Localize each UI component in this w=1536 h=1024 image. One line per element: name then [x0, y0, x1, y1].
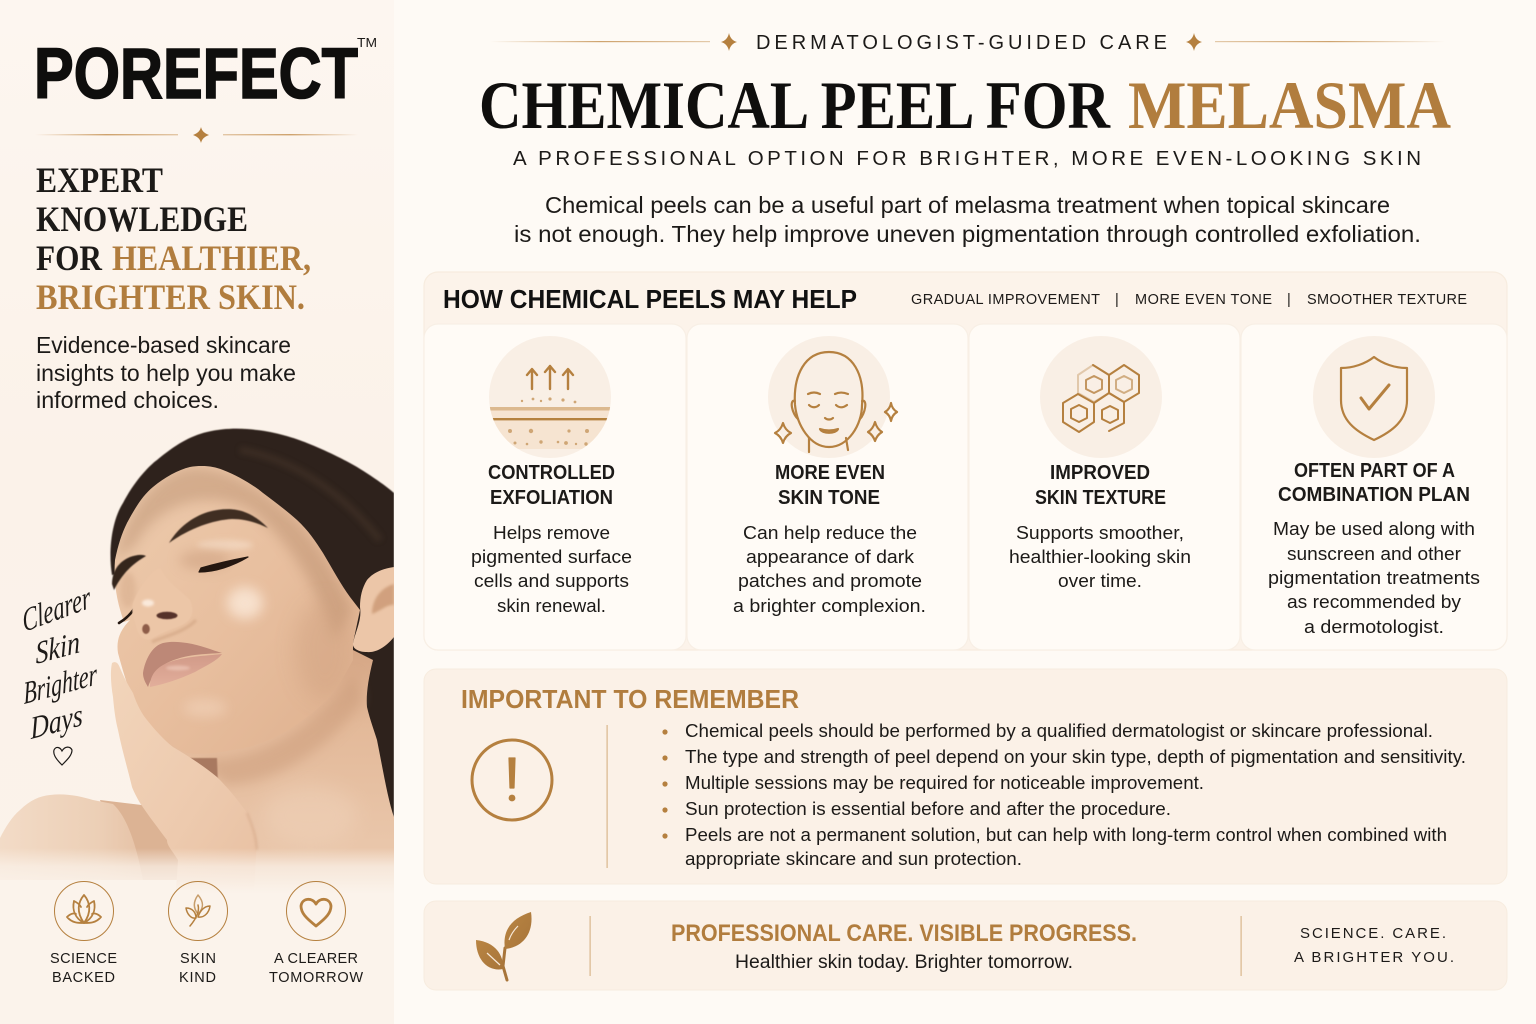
right eye — [199, 557, 248, 572]
bullet list: Peels are not a permanent solution, but can help with long-term control when combined with — [685, 824, 1447, 845]
sidebar description — [36, 332, 296, 413]
footer message — [671, 920, 1137, 973]
sidebar description: insights to help you make — [36, 360, 296, 386]
bullet list — [662, 720, 1466, 869]
bottom fade — [0, 848, 404, 894]
card 1 text — [471, 522, 632, 616]
footer tagline — [1294, 925, 1454, 966]
icon: leaf sprig — [186, 895, 210, 926]
badge: science backed: BACKED — [52, 970, 115, 986]
sidebar heading: HEALTHIER, — [112, 238, 311, 278]
hand shadow recess — [190, 758, 218, 778]
sidebar description: Evidence-based skincare — [36, 332, 291, 358]
card 2 text: appearance of dark — [746, 546, 915, 567]
card 2 heading: MORE EVEN — [775, 462, 885, 484]
bullet list: Multiple sessions may be required for noticeable improvement. — [685, 772, 1204, 793]
face — [115, 466, 360, 754]
card 3 text: over time. — [1058, 570, 1142, 591]
card 1 heading: CONTROLLED — [488, 462, 615, 484]
bullet list: Sun protection is essential before and after the procedure. — [685, 798, 1171, 819]
card 4 text: May be used along with — [1273, 518, 1475, 539]
card 4 text: a dermotologist. — [1304, 616, 1444, 637]
intro paragraph: Chemical peels can be a useful part of melasma treatment when topical skincare — [545, 192, 1390, 218]
card: more even skin tone — [687, 324, 968, 650]
left eye — [119, 609, 134, 623]
badge: a clearer tomorrow: A CLEARER — [274, 951, 358, 967]
card 2 text: patches and promote — [738, 570, 922, 591]
benefit tags: GRADUAL IMPROVEMENT — [911, 292, 1100, 308]
panel: brand sidebar — [0, 0, 404, 1024]
card 2 text: a brighter complexion. — [733, 595, 926, 616]
sidebar heading: EXPERT — [36, 160, 163, 200]
card 3 heading: IMPROVED — [1050, 462, 1150, 484]
icon: script heart — [54, 747, 72, 765]
bullet list: Chemical peels should be performed by a qualified dermatologist or skincare professional. — [685, 720, 1433, 741]
benefit tags: | — [1115, 292, 1119, 308]
subtitle: A PROFESSIONAL OPTION FOR BRIGHTER, MORE EVEN-LOOKING SKIN — [513, 147, 1421, 170]
icon: face with sparkles — [775, 352, 897, 452]
benefit tags — [911, 292, 1467, 308]
panel: footer banner — [424, 901, 1507, 990]
badge: science backed — [50, 882, 117, 986]
hand — [111, 662, 234, 882]
icon: divider star — [193, 127, 209, 143]
neck — [164, 650, 394, 882]
sidebar heading: FOR — [36, 238, 103, 278]
card 4 text: sunscreen and other — [1287, 543, 1461, 564]
footer tagline: A BRIGHTER YOU. — [1294, 949, 1454, 966]
sidebar description: informed choices. — [36, 387, 219, 413]
card 4 text: as recommended by — [1287, 591, 1462, 612]
title: CHEMICAL PEEL FOR — [479, 67, 1111, 143]
card 3 text — [1009, 522, 1191, 591]
card: improved skin texture — [969, 324, 1240, 650]
nose — [132, 608, 136, 614]
card 1 text: skin renewal. — [497, 595, 606, 616]
icon: hexagon cells — [1063, 365, 1139, 432]
sidebar heading: KNOWLEDGE — [36, 199, 248, 239]
neck highlight — [272, 791, 348, 834]
card 3 heading — [1035, 462, 1166, 509]
sidebar heading: BRIGHTER SKIN. — [36, 277, 305, 317]
hair mass — [110, 429, 394, 820]
card: controlled exfoliation — [424, 324, 686, 650]
sidebar heading — [36, 160, 311, 317]
card 4 text — [1268, 518, 1480, 637]
shoulder — [0, 794, 143, 880]
card 4 heading — [1278, 460, 1470, 506]
card 2 heading: SKIN TONE — [778, 487, 880, 509]
right eyebrow — [169, 509, 268, 543]
icon: heart — [301, 899, 331, 926]
shoulder back — [100, 800, 178, 880]
card 1 heading: EXFOLIATION — [490, 487, 613, 509]
benefit tags: | — [1287, 292, 1291, 308]
benefit tags: MORE EVEN TONE — [1135, 292, 1272, 308]
footer message: Healthier skin today. Brighter tomorrow. — [735, 952, 1073, 973]
jaw shadow — [218, 686, 368, 786]
bullet list: appropriate skincare and sun protection. — [685, 848, 1022, 869]
card 1 heading — [488, 462, 615, 509]
card 3 text: healthier-looking skin — [1009, 546, 1191, 567]
badge: skin kind: SKIN — [180, 951, 216, 967]
script note: Skin — [35, 624, 81, 671]
panel: important to remember — [424, 669, 1507, 884]
footer message: PROFESSIONAL CARE. VISIBLE PROGRESS. — [671, 920, 1137, 947]
portrait illustration — [0, 428, 394, 883]
bullet list: The type and strength of peel depend on your skin type, depth of pigmentation and sensitivity. — [685, 746, 1466, 767]
card 3 text: Supports smoother, — [1016, 522, 1184, 543]
badge: a clearer tomorrow — [269, 882, 363, 986]
lips — [143, 642, 222, 687]
footer tagline: SCIENCE. CARE. — [1300, 925, 1446, 942]
card 3 heading: SKIN TEXTURE — [1035, 487, 1166, 509]
icon: shield with check — [1341, 357, 1407, 440]
icon: exclamation circle — [472, 740, 552, 820]
title: MELASMA — [1128, 67, 1451, 143]
script note: Clearer — [20, 578, 93, 639]
card: combination plan — [1241, 324, 1507, 650]
left eyebrow — [112, 555, 146, 590]
badge: a clearer tomorrow: TOMORROW — [269, 970, 363, 986]
panel: how chemical peels may help — [424, 272, 1507, 650]
eyebrow: dermatologist-guided care — [490, 32, 1445, 54]
intro paragraph: is not enough. They help improve uneven pigmentation through controlled exfoliation. — [514, 221, 1421, 247]
badge: skin kind: KIND — [179, 970, 216, 986]
panel heading: IMPORTANT TO REMEMBER — [461, 684, 799, 714]
card 1 text: cells and supports — [474, 570, 629, 591]
script note: Brighter — [23, 656, 98, 711]
card 4 heading: OFTEN PART OF A — [1294, 460, 1455, 482]
card 2 text: Can help reduce the — [743, 522, 917, 543]
script note: Days — [29, 697, 84, 746]
panel heading: HOW CHEMICAL PEELS MAY HELP — [443, 284, 857, 314]
eyebrow: dermatologist-guided care: DERMATOLOGIST-GUIDED CARE — [756, 32, 1167, 54]
card 1 text: Helps remove — [493, 522, 610, 543]
face shading — [115, 467, 355, 717]
card 2 text — [733, 522, 926, 616]
intro paragraph — [514, 192, 1421, 247]
icon: lotus — [67, 895, 101, 923]
logo: POREFECT: POREFECT — [34, 35, 358, 114]
benefit tags: SMOOTHER TEXTURE — [1307, 292, 1467, 308]
badge: skin kind — [168, 882, 228, 986]
card 4 text: pigmentation treatments — [1268, 567, 1480, 588]
logo: POREFECT: TM — [357, 35, 377, 50]
card 4 heading: COMBINATION PLAN — [1278, 484, 1470, 506]
script note — [20, 578, 98, 765]
ear — [353, 567, 394, 652]
badge: science backed: SCIENCE — [50, 951, 117, 967]
icon: leaf sprig — [476, 912, 532, 980]
card 2 heading — [775, 462, 885, 509]
card 1 text: pigmented surface — [471, 546, 632, 567]
icon: skin layers with arrows — [485, 366, 615, 449]
